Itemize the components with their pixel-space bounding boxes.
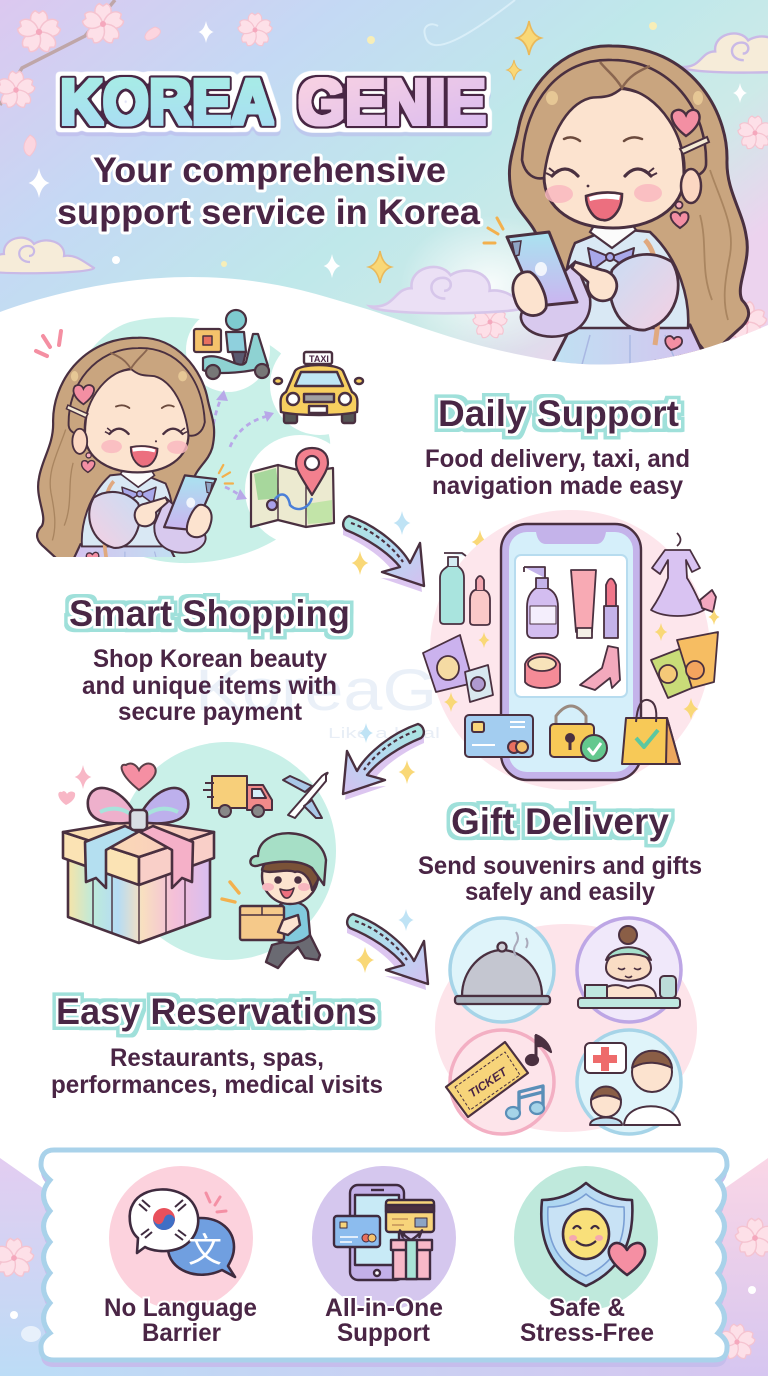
title: GENIE [298,66,486,138]
icon: taxi: TAXI [309,354,329,364]
text: smart shopping description [82,645,337,726]
phone [501,524,641,780]
label: All-in-One [325,1294,443,1322]
label: Safe & [549,1294,625,1322]
heading: gift delivery: Gift Delivery [451,801,669,842]
character: small girl [37,338,233,579]
text: easy reservations description: performances, medical visits [51,1071,383,1099]
panel: benefits [41,1150,727,1367]
label [325,1294,443,1347]
pink accents [36,331,61,356]
character: large girl with phone [484,46,749,372]
side bottles [440,553,490,625]
icon: medical visit [577,1030,681,1134]
icon: map and pin [251,448,334,527]
panel frame [41,1150,727,1360]
icon: gift box [63,788,214,943]
text: daily support description [425,445,690,500]
panel: daily support illustration [36,308,370,579]
panel: reservations illustration [435,918,697,1134]
icon: truck [203,776,272,817]
label: No Language [104,1294,257,1322]
character: delivery boy [240,833,326,968]
icon: language bubbles [109,1166,253,1310]
text: smart shopping description: Shop Korean beauty [93,645,327,673]
background: footer right [708,1158,768,1376]
title [60,66,486,138]
products on screen [524,567,620,690]
arrow: gift to reservations [347,914,428,990]
heading: smart shopping: Smart Shopping [69,593,350,634]
dress [651,533,716,616]
subtitle: Your comprehensive [93,151,446,190]
text: daily support description: navigation made easy [432,472,683,500]
text: gift delivery description [418,852,702,906]
sparkles around arrow [359,723,415,784]
icon: airplane [283,773,328,818]
mint backdrop [64,317,330,563]
card, lock and shopping bag [465,700,680,764]
icon: restaurant cloche [450,918,554,1022]
arrow: shopping to gift [343,724,424,800]
panel shadow [41,1157,727,1367]
text: smart shopping description: and unique items with [82,672,337,700]
heading: daily support: Daily Support [438,393,679,434]
watermark: Like a local [328,725,440,742]
watermark: KoreaGenie [195,658,570,723]
panel: smart shopping illustration [423,510,720,790]
background: footer left [0,1158,60,1376]
subtitle [57,151,481,232]
watermark [195,658,570,742]
icon: spa [577,918,681,1022]
sparkles around arrow [352,511,488,575]
icon: shield with smile [514,1166,658,1310]
title: KOREA [60,66,274,138]
sparkles around arrow [356,909,414,973]
icon: ticket and notes [446,1030,554,1134]
icon: language bubbles: 文 [188,1232,222,1270]
text: gift delivery description: safely and easily [465,878,655,906]
sparkles [655,623,667,641]
label [520,1294,654,1347]
snacks [423,632,718,702]
arrow: daily to shopping [343,516,424,592]
heading: easy reservations: Easy Reservations [56,991,377,1032]
panel: gift delivery illustration [58,742,336,968]
background: footer strip [40,1355,730,1376]
icon: hearts and sparkle [58,764,156,805]
text: smart shopping description: secure payment [118,698,303,726]
icon: taxi [274,352,363,423]
icon: ticket and notes: TICKET [466,1064,511,1100]
text: easy reservations description [51,1044,383,1099]
label: Support [337,1319,431,1347]
icon: scooter [194,310,269,379]
text: daily support description: Food delivery, taxi, and [425,445,690,473]
background: header gradient [0,0,768,364]
label [104,1294,257,1347]
text: gift delivery description: Send souvenirs and gifts [418,852,702,880]
label: Stress-Free [520,1319,654,1347]
icon: phone, cards and gift [312,1166,456,1310]
dashed arrows [212,396,268,497]
subtitle: support service in Korea [57,193,481,232]
header decorations [0,0,768,355]
label: Barrier [142,1319,221,1347]
footer flowers [0,1218,768,1361]
spark lines [222,882,239,902]
text: easy reservations description: Restaurants, spas, [110,1044,324,1072]
